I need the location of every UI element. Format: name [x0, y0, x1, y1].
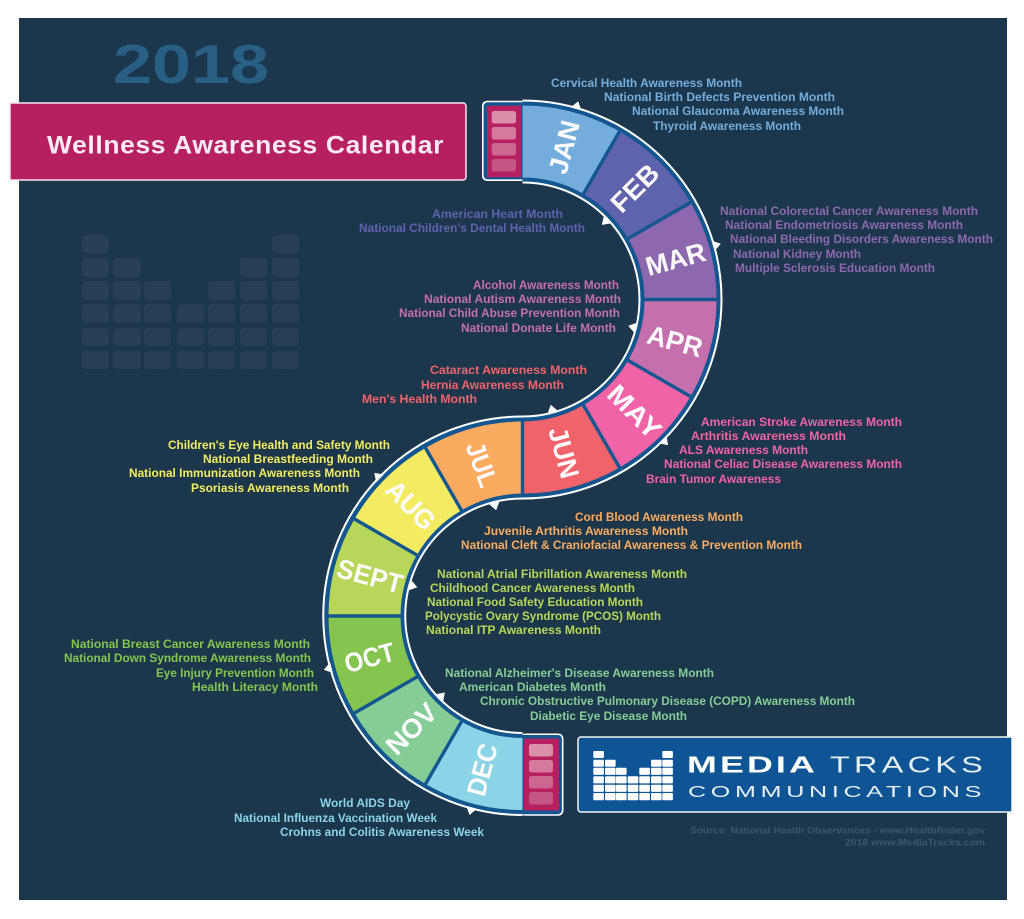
list: August observances: National Breastfeeding Month: [203, 452, 373, 466]
list: September observances: National ITP Awareness Month: [426, 623, 601, 637]
list: August observances: Psoriasis Awareness Month: [191, 481, 349, 495]
list: September observances: National Atrial Fibrillation Awareness Month: [437, 567, 687, 581]
segment: APR: APR: [644, 320, 706, 363]
list: February observances: American Heart Month: [432, 207, 563, 221]
bottom cap: calendar tabs: [524, 738, 559, 810]
list: November observances: Diabetic Eye Disease Month: [530, 709, 687, 723]
list: January observances: National Birth Defects Prevention Month: [604, 90, 835, 104]
list: March observances: National Colorectal Cancer Awareness Month: [720, 204, 978, 218]
source note: [690, 826, 986, 848]
source note: Source: National Health Observances - www.Healthfinder.gov: [690, 826, 986, 836]
list: March observances: National Bleeding Disorders Awareness Month: [730, 232, 993, 246]
segment: FEB: FEB: [605, 158, 665, 219]
logo wordmark: MEDIA: [687, 752, 818, 778]
segment: JUL: [444, 438, 522, 491]
list: January observances: [551, 76, 844, 133]
segment: MAY: MAY: [601, 379, 668, 445]
list: May observances: National Celiac Disease Awareness Month: [664, 457, 902, 471]
logo wordmark: TRACKS: [830, 752, 987, 778]
list: August observances: [129, 438, 390, 495]
list: November observances: National Alzheimer's Disease Awareness Month: [445, 666, 714, 680]
list: March observances: [720, 204, 993, 275]
list: January observances: National Glaucoma Awareness Month: [632, 104, 844, 118]
list: November observances: [445, 666, 855, 723]
logo wordmark: [687, 752, 987, 801]
list: March observances: National Endometriosis Awareness Month: [725, 218, 963, 232]
list: July observances: Juvenile Arthritis Awareness Month: [484, 524, 688, 538]
source note: 2018 www.MediaTracks.com: [845, 838, 985, 848]
list: June observances: [362, 363, 587, 406]
list: September observances: Childhood Cancer Awareness Month: [430, 581, 635, 595]
title banner: Wellness Awareness Calendar: [47, 132, 444, 160]
list: April observances: Alcohol Awareness Month: [473, 278, 619, 292]
segment: OCT: OCT: [341, 637, 399, 679]
list: July observances: Cord Blood Awareness Month: [575, 510, 743, 524]
logo icon: equalizer bars: [593, 751, 673, 800]
segment: SEPT: [334, 537, 407, 616]
segment: JUN: [522, 424, 602, 482]
ribbon outline: white and blue edges with end caps: [364, 101, 680, 816]
list: February observances: National Children's Dental Health Month: [359, 221, 585, 235]
list: January observances: Thyroid Awareness Month: [653, 119, 801, 133]
list: May observances: Brain Tumor Awareness: [646, 472, 781, 486]
list: March observances: Multiple Sclerosis Education Month: [735, 261, 935, 275]
segment: MAR: [642, 220, 709, 300]
list: May observances: ALS Awareness Month: [679, 443, 808, 457]
logo banner: MediaTracks Communications: [578, 737, 1012, 812]
list: April observances: National Child Abuse Prevention Month: [399, 306, 620, 320]
segment: JAN: [522, 117, 602, 177]
segment: JAN: JAN: [543, 117, 586, 177]
list: April observances: [399, 278, 621, 335]
list: September observances: Polycystic Ovary Syndrome (PCOS) Month: [425, 609, 661, 623]
list: August observances: National Immunization Awareness Month: [129, 466, 360, 480]
list: November observances: American Diabetes Month: [459, 680, 606, 694]
list: June observances: Men's Health Month: [362, 392, 477, 406]
list: October observances: [64, 637, 318, 694]
list: May observances: American Stroke Awareness Month: [701, 415, 902, 429]
logo wordmark: COMMUNICATIONS: [688, 784, 986, 801]
list: January observances: Cervical Health Awareness Month: [551, 76, 742, 90]
segment: JUN: JUN: [542, 424, 585, 482]
segment: AUG: AUG: [380, 474, 442, 536]
list: August observances: Children's Eye Health and Safety Month: [168, 438, 390, 452]
list: October observances: National Down Syndrome Awareness Month: [64, 651, 311, 665]
segment: JUL: JUL: [460, 438, 503, 491]
list: December observances: Crohns and Colitis Awareness Week: [280, 825, 484, 839]
pointer ticks linking months to their lists: [322, 100, 722, 816]
segment: MAR: MAR: [642, 237, 709, 282]
list: April observances: National Donate Life Month: [461, 321, 616, 335]
watermark: equalizer bars: [82, 235, 299, 369]
segment: SEPT: SEPT: [334, 553, 407, 600]
title banner: [10, 103, 466, 180]
list: May observances: [646, 415, 902, 486]
list: June observances: Hernia Awareness Month: [421, 378, 564, 392]
list: October observances: National Breast Cancer Awareness Month: [71, 637, 310, 651]
segment: NOV: NOV: [380, 697, 443, 761]
list: July observances: [461, 510, 802, 552]
list: December observances: [234, 796, 484, 839]
list: May observances: Arthritis Awareness Month: [691, 429, 846, 443]
list: September observances: National Food Safety Education Month: [427, 595, 643, 609]
list: April observances: National Autism Awareness Month: [424, 292, 621, 306]
list: October observances: Eye Injury Prevention Month: [156, 666, 314, 680]
list: June observances: Cataract Awareness Month: [430, 363, 587, 377]
list: December observances: World AIDS Day: [320, 796, 410, 810]
segment: APR: [644, 300, 706, 378]
segment: DEC: DEC: [461, 740, 504, 799]
year heading: 2018: [113, 33, 269, 95]
list: October observances: Health Literacy Month: [192, 680, 318, 694]
list: November observances: Chronic Obstructive Pulmonary Disease (COPD) Awareness Month: [480, 694, 855, 708]
segment: OCT: [341, 616, 399, 695]
top cap: calendar tabs: [487, 106, 521, 177]
list: September observances: [425, 567, 687, 637]
list: December observances: National Influenza Vaccination Week: [234, 811, 437, 825]
list: July observances: National Cleft & Craniofacial Awareness & Prevention Month: [461, 538, 802, 552]
list: February observances: [359, 207, 585, 235]
list: March observances: National Kidney Month: [733, 247, 861, 261]
segment: DEC: [444, 740, 522, 799]
